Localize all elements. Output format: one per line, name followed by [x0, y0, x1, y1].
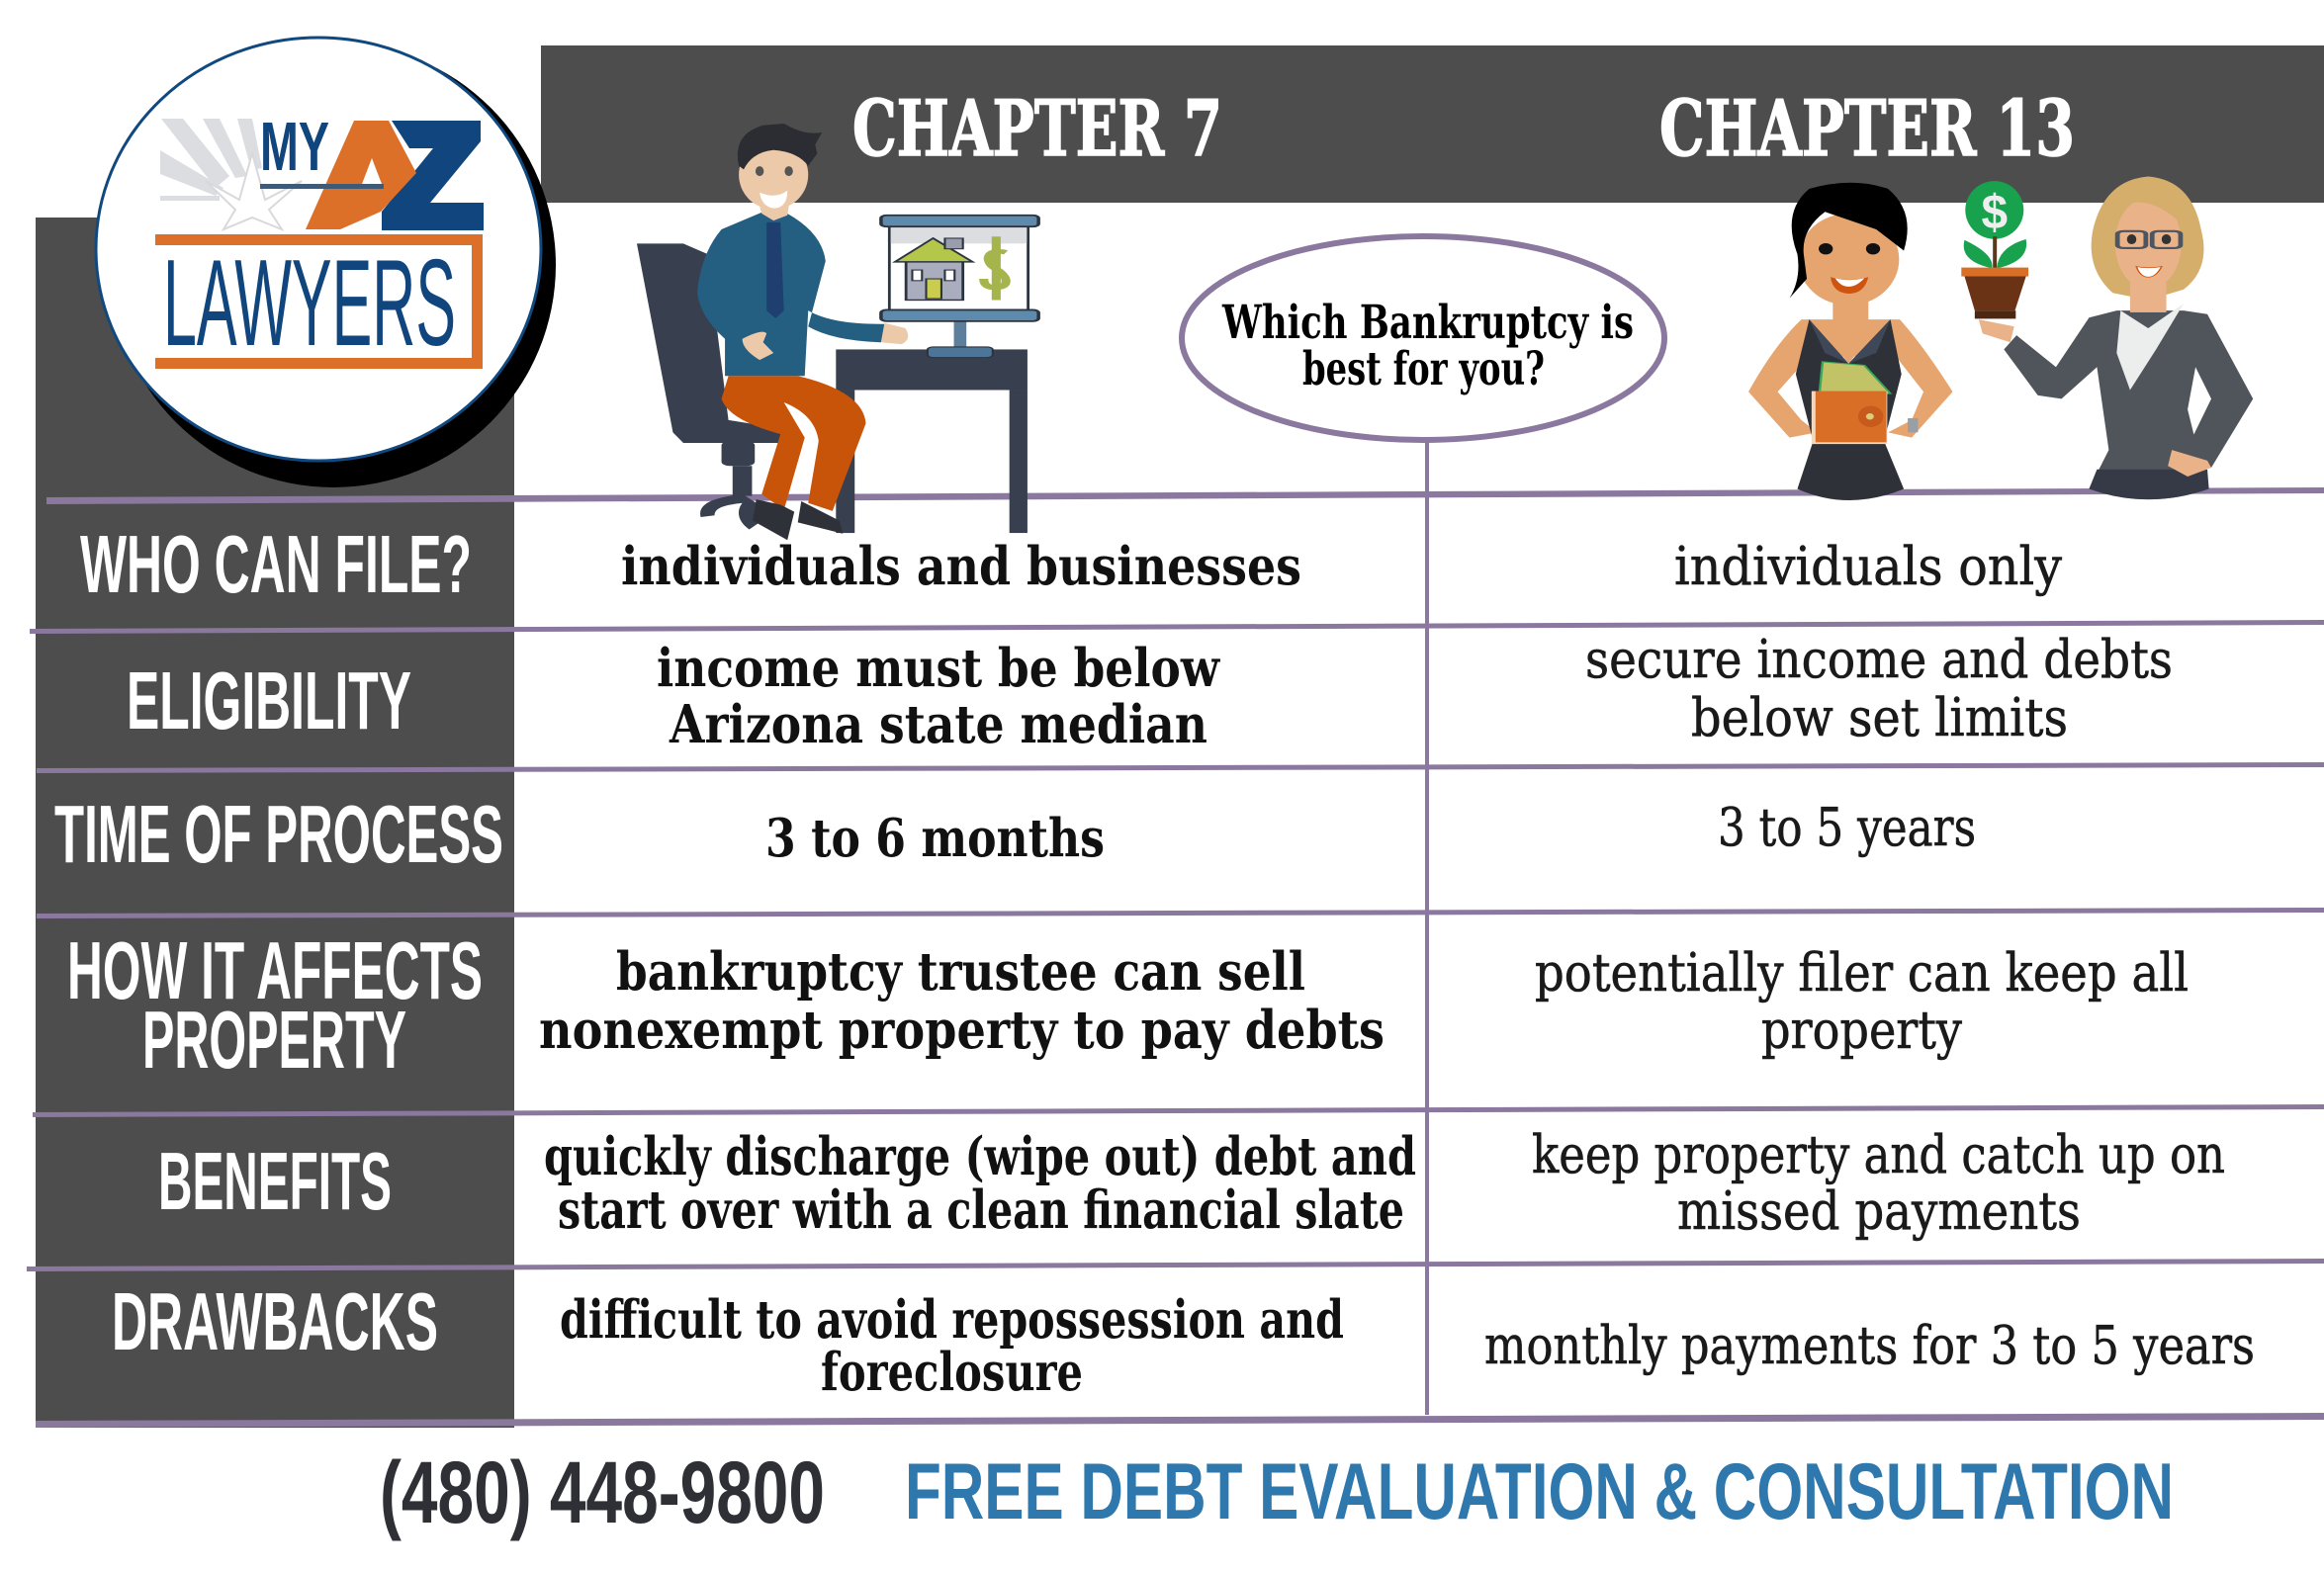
- benefits: chapter 13: missed payments: [1677, 1181, 2081, 1242]
- logo sun rays: [160, 119, 262, 201]
- eyes: [756, 166, 793, 176]
- neck and face: [739, 140, 908, 360]
- illustration: woman with wallet and woman with money plant: [1748, 177, 2253, 500]
- hair: [738, 124, 822, 169]
- question bubble: [1182, 236, 1664, 440]
- logo letter Z: [382, 121, 484, 230]
- who can file: chapter 7: individuals and businesses: [621, 536, 1301, 597]
- logo circle: [96, 38, 541, 461]
- blonde woman fringe: [2111, 190, 2188, 225]
- property: chapter 7: [539, 941, 1385, 1061]
- logo lawyers box: [155, 234, 483, 369]
- logo badge: [96, 38, 556, 487]
- eligibility: chapter 7: [657, 638, 1220, 755]
- chapter 13 column text: [1484, 537, 2255, 1376]
- trousers: [722, 376, 865, 511]
- chapter 13 heading: CHAPTER 13: [1659, 84, 2075, 174]
- property: chapter 7: bankruptcy trustee can sell: [616, 941, 1305, 1003]
- phone number: (480) 448-9800: [380, 1442, 825, 1541]
- blonde woman eyes: [2127, 234, 2171, 244]
- eligibility: chapter 7: Arizona state median: [669, 694, 1207, 755]
- label: who can file: WHO CAN FILE?: [80, 518, 472, 610]
- watch: [1908, 418, 1918, 432]
- who can file: chapter 13: individuals only: [1674, 537, 2062, 597]
- logo star: [206, 153, 302, 229]
- blonde woman jacket: [2004, 310, 2253, 499]
- blonde woman shirt: [2116, 304, 2184, 390]
- benefits: chapter 7: quickly discharge (wipe out) debt and: [544, 1126, 1416, 1187]
- plant leaves: [1964, 239, 2026, 268]
- blonde woman smile: [2136, 267, 2162, 277]
- label: how it affects property: HOW IT AFFECTS: [67, 924, 483, 1016]
- eligibility: chapter 13: secure income and debts: [1585, 630, 2173, 690]
- logo shadow: [111, 43, 556, 487]
- tie: [766, 222, 784, 318]
- left label panel: [36, 218, 514, 1428]
- logo letter A: [306, 121, 416, 229]
- wallet woman dress: [1796, 319, 1904, 500]
- wallet woman neck and face: [1798, 214, 1899, 364]
- desk: [836, 349, 1028, 533]
- label: time of process: TIME OF PROCESS: [54, 788, 503, 880]
- presentation board: [881, 216, 1038, 358]
- blonde woman hands: [1979, 319, 2211, 477]
- shoes: [753, 499, 843, 540]
- illustration: woman with wallet and woman with money plant: $: [1981, 186, 2008, 240]
- eligibility: chapter 13: [1585, 630, 2173, 748]
- money: [1820, 362, 1891, 393]
- blonde woman face: [2115, 198, 2182, 312]
- chapter 7 heading: CHAPTER 7: [852, 84, 1222, 174]
- header band: [541, 45, 2324, 203]
- time: chapter 7: 3 to 6 months: [765, 808, 1105, 869]
- property: chapter 7: nonexempt property to pay debts: [539, 1000, 1385, 1061]
- eligibility: chapter 13: below set limits: [1691, 688, 2068, 748]
- shirt: [697, 212, 884, 376]
- wallet woman arms: [1748, 319, 1953, 438]
- blonde woman glasses: [2117, 231, 2181, 248]
- row labels: [54, 518, 503, 1367]
- bubble text line 1: Which Bankruptcy is: [1221, 296, 1634, 350]
- benefits: chapter 7: [544, 1126, 1416, 1241]
- table grid lines: [27, 441, 2324, 1428]
- bubble ellipse: [1182, 236, 1664, 440]
- logo badge: LAWYERS: [163, 235, 456, 372]
- illustration: man at desk with presentation board: [637, 124, 1038, 540]
- plant pot: [1961, 268, 2028, 277]
- logo letters MY: MY: [260, 108, 329, 185]
- bubble text line 2: best for you?: [1302, 342, 1545, 396]
- label: how it affects property: PROPERTY: [142, 994, 406, 1086]
- property: chapter 13: [1535, 943, 2189, 1061]
- label: benefits: BENEFITS: [158, 1135, 392, 1227]
- blonde woman hair: [2092, 177, 2203, 300]
- label: how it affects property: [67, 924, 483, 1086]
- time: chapter 13: 3 to 5 years: [1718, 798, 1976, 858]
- label: eligibility: ELIGIBILITY: [127, 655, 411, 746]
- label: drawbacks: DRAWBACKS: [112, 1275, 438, 1367]
- flower dollar head: [1965, 181, 2023, 239]
- property: chapter 13: property: [1761, 1001, 1962, 1061]
- office chair: [637, 243, 794, 530]
- drawbacks: chapter 7: [560, 1289, 1344, 1403]
- blonde woman skirt: [2089, 470, 2209, 499]
- eligibility: chapter 7: income must be below: [657, 638, 1220, 699]
- wallet woman smile: [1831, 277, 1868, 294]
- wallet woman hair: [1790, 183, 1908, 299]
- wallet woman eyes: [1819, 243, 1880, 254]
- chapter 7 column text: [539, 536, 1416, 1403]
- drawbacks: chapter 7: difficult to avoid repossession and: [560, 1289, 1344, 1351]
- benefits: chapter 7: start over with a clean financial slate: [558, 1179, 1404, 1241]
- smile: [760, 191, 787, 209]
- drawbacks: chapter 7: foreclosure: [821, 1342, 1083, 1403]
- wallet: [1812, 392, 1887, 444]
- benefits: chapter 13: [1532, 1125, 2225, 1242]
- property: chapter 13: potentially filer can keep all: [1535, 943, 2189, 1004]
